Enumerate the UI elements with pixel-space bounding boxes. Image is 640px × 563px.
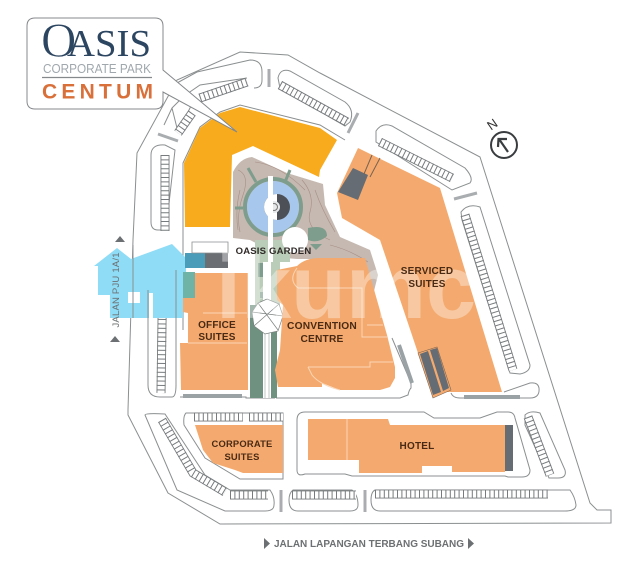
logo: oasis: ASIS: [67, 23, 151, 65]
hotel service core: [505, 425, 513, 471]
label: corporate suites: CORPORATE: [211, 438, 273, 449]
road label: jalan lapangan terbang subang: JALAN LAPANGAN TERBANG SUBANG: [274, 539, 464, 550]
parking deck: [418, 347, 451, 398]
label: office suites: SUITES: [198, 332, 236, 343]
site boundary and roads: [128, 52, 611, 524]
building: serviced suites: [337, 148, 502, 392]
logo: oasis: O: [41, 12, 76, 68]
callout: project logo: [27, 12, 237, 132]
label: corporate suites: SUITES: [224, 451, 260, 462]
oasis garden landscape: [233, 157, 378, 398]
label: hotel: HOTEL: [400, 441, 434, 452]
label: convention centre: CONVENTION: [287, 321, 357, 332]
fountain: [235, 168, 308, 253]
label: office suites: OFFICE: [198, 320, 236, 331]
logo: oasis: [41, 12, 151, 68]
label: convention centre: CENTRE: [300, 334, 344, 345]
building: hotel: [308, 419, 505, 473]
central walkway: [263, 176, 273, 398]
logo: corporate park: CORPORATE PARK: [43, 62, 152, 76]
building: corporate suites: [195, 425, 283, 473]
label: serviced suites: SERVICED: [401, 266, 453, 277]
building: convention centre: [275, 258, 395, 390]
logo rule: [42, 76, 152, 78]
logo: centum: CENTUM: [42, 80, 153, 104]
building: retail podium, highlighted in yellow: [184, 107, 337, 227]
road label: jalan pju 1a/1: [110, 236, 125, 342]
compass: N: [484, 116, 500, 133]
compass: [484, 116, 517, 158]
service core: [338, 168, 368, 200]
watermark: text: ikumc: [216, 238, 476, 338]
road label: jalan pju 1a/1: JALAN PJU 1A/1: [111, 252, 122, 328]
label: oasis garden: OASIS GARDEN: [236, 246, 311, 257]
ramp: [364, 155, 380, 177]
building: office suites: [180, 273, 248, 390]
building inner lines: [188, 268, 393, 390]
watermark: house icon: [94, 242, 228, 318]
label: serviced suites: SUITES: [408, 279, 446, 290]
parking bays: [161, 82, 550, 495]
